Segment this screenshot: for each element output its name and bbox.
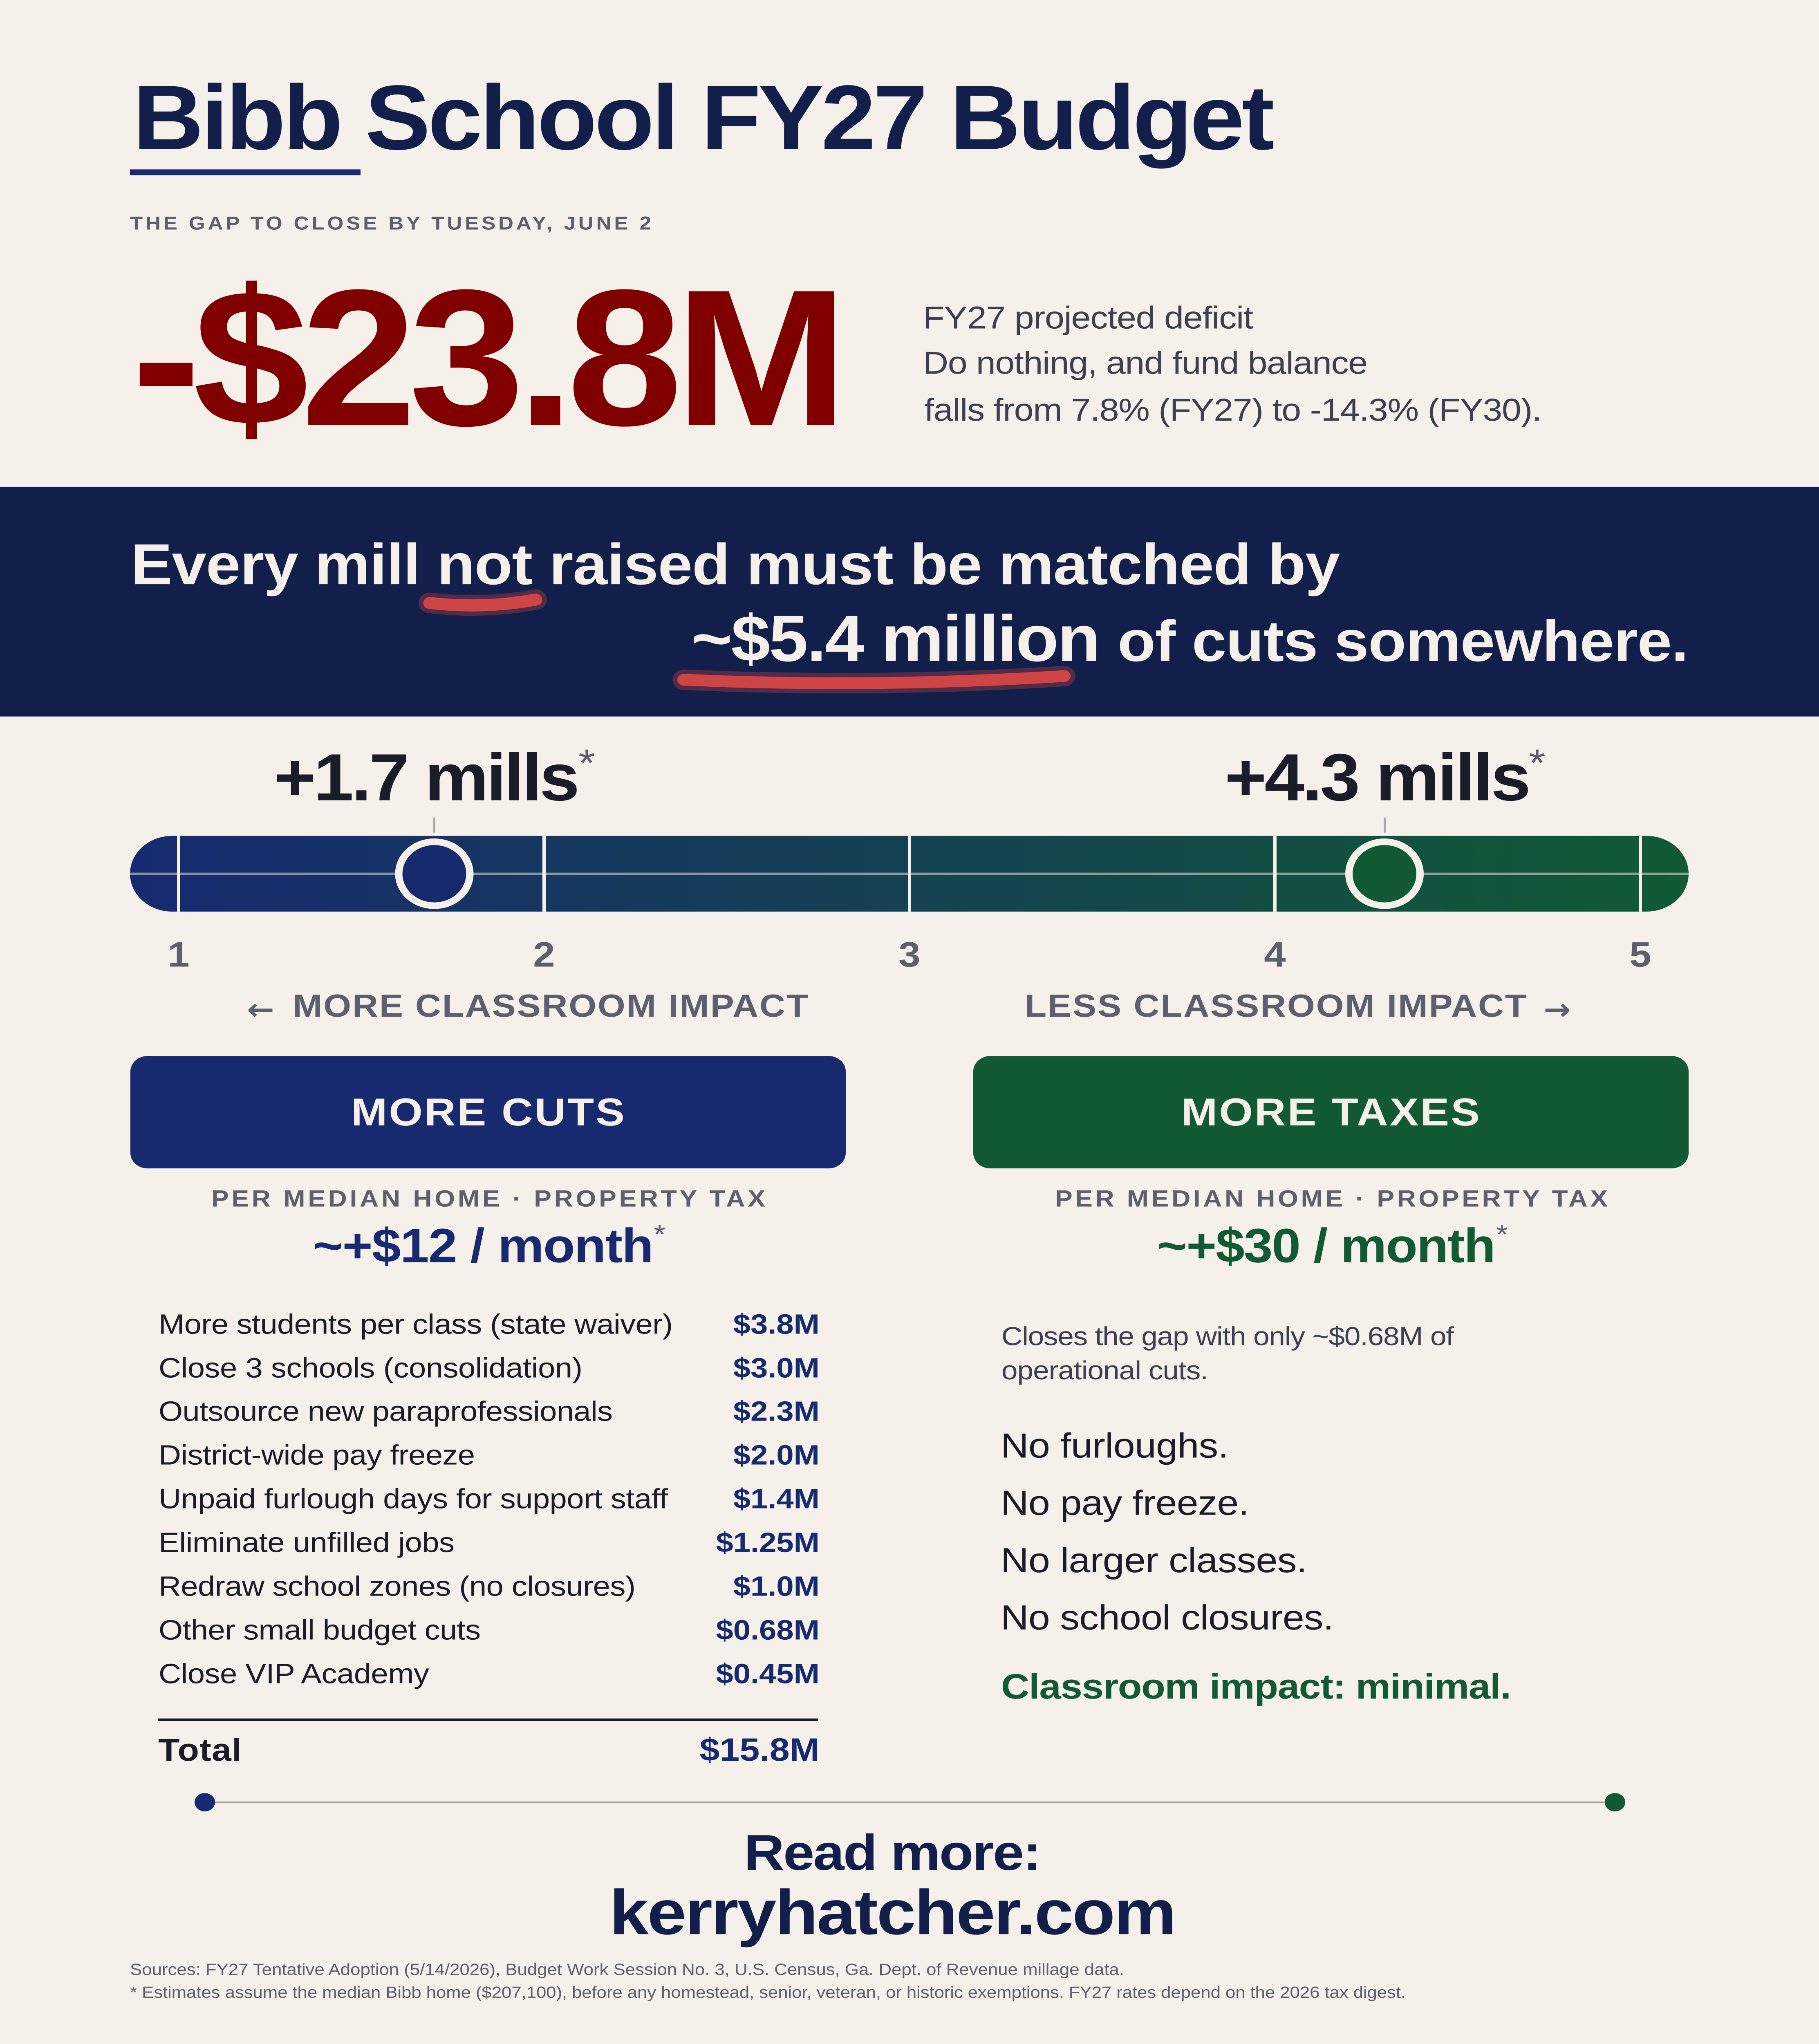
list: cuts: $1.4M	[733, 1483, 820, 1515]
list: no cuts	[1001, 1426, 1334, 1637]
label: less classroom impact: LESS CLASSROOM IMPACT	[1025, 988, 1527, 1024]
list: cuts: Unpaid furlough days for support staff	[159, 1483, 668, 1515]
pointer: 1.7	[433, 818, 435, 833]
scale numbers: 5	[1629, 935, 1651, 975]
marker: 4.3 mills	[1349, 842, 1420, 906]
list: cuts: $3.8M	[733, 1309, 820, 1340]
label: +4.3 mills: +4.3 mills	[1225, 740, 1531, 815]
title: Bibb School FY27 Budget	[133, 66, 1275, 169]
list: cuts: Eliminate unfilled jobs	[159, 1527, 455, 1558]
text: closes the gap: operational cuts.	[1001, 1356, 1208, 1385]
scale numbers: 3	[898, 935, 921, 975]
underline: not	[430, 600, 535, 605]
scale numbers	[168, 935, 1651, 975]
list: no cuts: No furloughs.	[1001, 1426, 1229, 1465]
banner headline: of cuts somewhere.	[1118, 609, 1689, 674]
panel: banner	[0, 487, 1819, 717]
button: more taxes: MORE TAXES	[1181, 1091, 1480, 1134]
caption: per median home, cuts: PER MEDIAN HOME · PROPERTY TAX	[211, 1186, 765, 1212]
pointer: 4.3	[1384, 818, 1386, 833]
deficit description: FY27 projected deficit	[923, 300, 1253, 336]
list: cuts	[159, 1309, 820, 1690]
sources: * Estimates assume the median Bibb home ($207,100), before any homestead, senior, veteran, or historic exemptions. FY27 rates depend on the 2026 tax digest.	[130, 1983, 1406, 2001]
conclusion: classroom impact: Classroom impact: minimal.	[1001, 1667, 1511, 1706]
list: cuts: District-wide pay freeze	[159, 1439, 475, 1471]
label: +1.7 mills: *	[578, 742, 595, 784]
total row	[158, 1719, 820, 1768]
deficit description: Do nothing, and fund balance	[923, 345, 1368, 381]
list: cuts: $0.45M	[716, 1658, 820, 1690]
list: cuts: Redraw school zones (no closures)	[159, 1571, 636, 1602]
sources	[130, 1961, 1406, 2001]
total row: Total	[158, 1732, 242, 1768]
text: closes the gap: Closes the gap with only ~$0.68M of	[1001, 1322, 1454, 1351]
label: less classroom impact: →	[1543, 993, 1571, 1026]
list: no cuts: No pay freeze.	[1001, 1484, 1249, 1523]
amount: $30 per month: *	[1496, 1219, 1508, 1250]
underline: amount	[684, 676, 1064, 683]
sources: Sources: FY27 Tentative Adoption (5/14/2026), Budget Work Session No. 3, U.S. Census, Ga. Dept. of Revenue millage data.	[130, 1961, 1124, 1979]
banner headline: ~$5.4 million	[691, 602, 1100, 675]
label: more classroom impact: MORE CLASSROOM IMPACT	[293, 988, 808, 1024]
label: +1.7 mills: +1.7 mills	[274, 740, 580, 815]
scale numbers: 4	[1264, 935, 1286, 975]
banner headline: Every mill not raised must be matched by	[131, 532, 1340, 597]
list: no cuts: No school closures.	[1001, 1598, 1334, 1637]
slider bar	[130, 836, 1689, 912]
eyebrow: gap deadline: THE GAP TO CLOSE BY TUESDAY, JUNE 2	[130, 213, 651, 234]
marker: 1.7 mills	[399, 842, 470, 906]
scale numbers: 2	[533, 935, 555, 975]
list: cuts: $2.3M	[733, 1396, 820, 1427]
scale numbers: 1	[168, 935, 190, 975]
list: cuts: $3.0M	[733, 1352, 820, 1384]
button: more cuts	[130, 1056, 846, 1168]
footer connector	[195, 1793, 1625, 1811]
list: cuts: Close VIP Academy	[159, 1658, 429, 1690]
list: cuts: $1.0M	[733, 1571, 820, 1602]
call to action	[609, 1824, 1176, 1948]
list: cuts: Close 3 schools (consolidation)	[159, 1352, 582, 1384]
banner headline	[131, 532, 1689, 675]
label: more classroom impact: ←	[247, 993, 274, 1026]
call to action: Read more:	[744, 1824, 1042, 1881]
label: +4.3 mills: *	[1529, 742, 1546, 784]
deficit description: falls from 7.8% (FY27) to -14.3% (FY30).	[924, 392, 1542, 428]
list: cuts: $2.0M	[733, 1439, 820, 1471]
list: cuts: Other small budget cuts	[159, 1614, 481, 1646]
list: cuts: More students per class (state waiver)	[159, 1309, 673, 1340]
text: closes the gap	[1001, 1322, 1454, 1385]
amount: $12 per month: *	[654, 1219, 665, 1250]
big number: deficit: -$23.8M	[132, 249, 848, 466]
list: cuts: Outsource new paraprofessionals	[159, 1396, 613, 1427]
button: more taxes	[973, 1056, 1689, 1168]
list: cuts: $0.68M	[716, 1614, 820, 1646]
button: more cuts: MORE CUTS	[351, 1091, 625, 1134]
list: no cuts: No larger classes.	[1001, 1541, 1307, 1580]
amount: $30 per month: ~+$30 / month	[1157, 1219, 1496, 1272]
deficit description	[923, 300, 1542, 428]
total row: $15.8M	[699, 1731, 820, 1768]
amount: $12 per month: ~+$12 / month	[313, 1219, 654, 1272]
call to action: kerryhatcher.com	[609, 1877, 1176, 1948]
caption: per median home, taxes: PER MEDIAN HOME · PROPERTY TAX	[1055, 1186, 1608, 1212]
list: cuts: $1.25M	[716, 1527, 820, 1558]
